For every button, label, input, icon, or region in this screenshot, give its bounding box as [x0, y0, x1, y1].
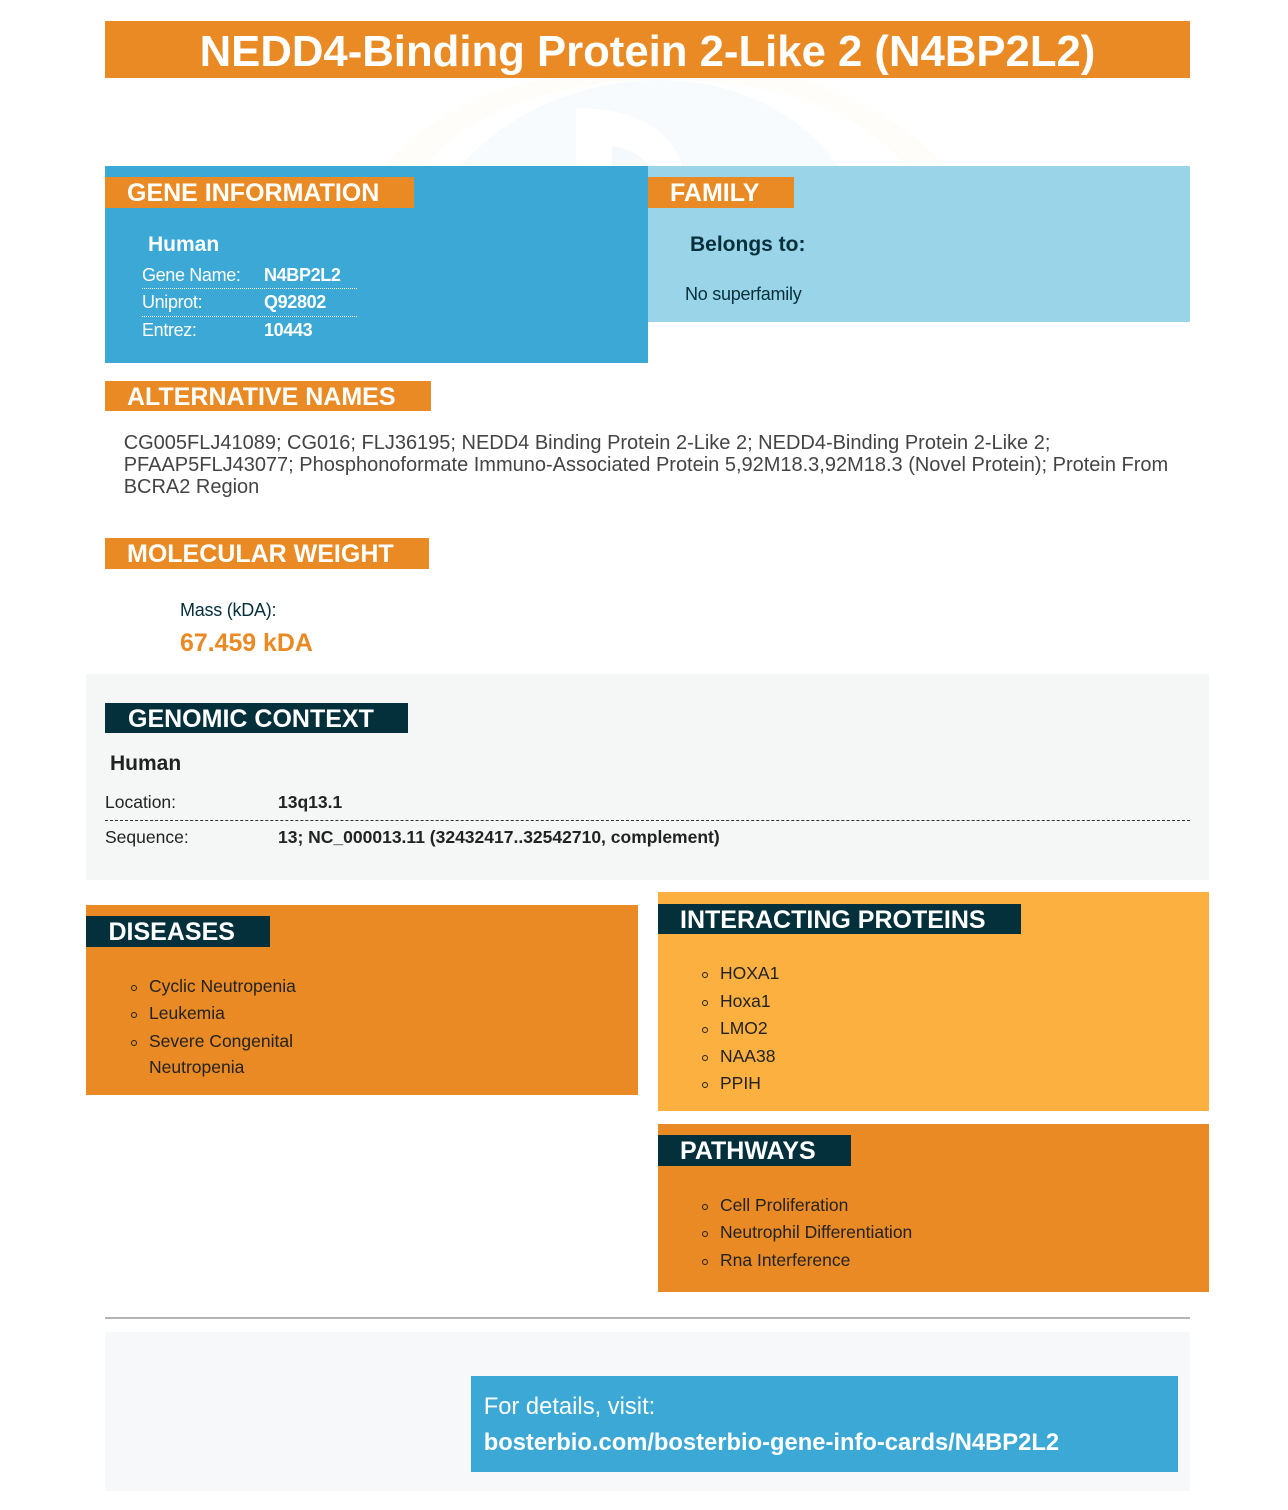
callout: details link: bosterbio.com/bosterbio-gene-info-cards/N4BP2L2	[484, 1429, 1059, 1456]
pathways list: Rna Interference	[720, 1250, 850, 1270]
interacting proteins list: Hoxa1	[720, 991, 771, 1011]
interacting proteins list: NAA38	[720, 1046, 775, 1066]
genomic species: Human	[110, 752, 181, 775]
interacting proteins list: LMO2	[720, 1018, 768, 1038]
watermark logo	[612, 146, 650, 166]
gene info table: Q92802	[264, 292, 326, 312]
diseases list	[131, 976, 296, 1077]
heading: family	[648, 177, 794, 208]
gene info table: Entrez:	[142, 320, 197, 340]
heading: alternative names: ALTERNATIVE NAMES	[127, 383, 396, 411]
title banner: NEDD4-Binding Protein 2-Like 2 (N4BP2L2)	[200, 27, 1095, 76]
gene info table	[142, 265, 357, 340]
heading: diseases: DISEASES	[108, 918, 235, 946]
family belongs to: Belongs to:	[690, 233, 806, 256]
gene info table: Gene Name:	[142, 265, 241, 285]
heading: molecular weight: MOLECULAR WEIGHT	[127, 540, 394, 568]
panel: family	[648, 166, 1190, 322]
heading: pathways: PATHWAYS	[680, 1137, 816, 1165]
interacting proteins list	[702, 963, 779, 1093]
alternative names text: BCRA2 Region	[124, 476, 259, 498]
family value: No superfamily	[685, 284, 802, 304]
gene info table: Uniprot:	[142, 292, 202, 312]
diseases list: Cyclic Neutropenia	[149, 976, 296, 996]
callout: details link: For details, visit:	[484, 1393, 655, 1420]
panel: gene information	[105, 166, 648, 363]
interacting proteins list: PPIH	[720, 1073, 761, 1093]
mass label: Mass (kDA):	[180, 600, 276, 620]
callout: details link	[471, 1376, 1178, 1472]
gene info table: 10443	[264, 320, 312, 340]
diseases list: Leukemia	[149, 1003, 225, 1023]
heading: diseases	[86, 916, 270, 947]
panel: pathways	[658, 1124, 1209, 1292]
heading: gene information: GENE INFORMATION	[127, 179, 379, 207]
alternative names text: PFAAP5FLJ43077; Phosphonoformate Immuno-Associated Protein 5,92M18.3,92M18.3 (Novel Protein); Protein From	[124, 454, 1168, 476]
pathways list: Cell Proliferation	[720, 1195, 848, 1215]
genomic table: Location:	[105, 792, 176, 812]
footer panel	[105, 1332, 1190, 1491]
diseases list: Severe Congenital	[149, 1031, 293, 1051]
heading: interacting proteins: INTERACTING PROTEINS	[680, 906, 986, 934]
alternative names text: CG005FLJ41089; CG016; FLJ36195; NEDD4 Binding Protein 2-Like 2; NEDD4-Binding Protein 2-Like 2;	[124, 432, 1050, 454]
mass value: 67.459 kDA	[180, 629, 313, 657]
diseases list: Neutropenia	[149, 1057, 244, 1077]
interacting proteins list: HOXA1	[720, 963, 779, 983]
genomic table: 13q13.1	[278, 792, 342, 812]
genomic table: 13; NC_000013.11 (32432417..32542710, complement)	[278, 827, 720, 847]
gene info table: N4BP2L2	[264, 265, 341, 285]
heading: pathways	[658, 1135, 851, 1166]
alternative names text	[124, 432, 1168, 498]
pathways list: Neutrophil Differentiation	[720, 1222, 912, 1242]
pathways list	[702, 1195, 912, 1270]
panel: diseases	[86, 905, 638, 1095]
genomic table	[105, 792, 1190, 847]
panel: interacting proteins	[658, 892, 1209, 1111]
panel: genomic context	[86, 674, 1209, 880]
genomic table: Sequence:	[105, 827, 189, 847]
heading: family: FAMILY	[670, 179, 759, 207]
gene info species: Human	[148, 233, 219, 256]
heading: genomic context: GENOMIC CONTEXT	[128, 705, 374, 733]
